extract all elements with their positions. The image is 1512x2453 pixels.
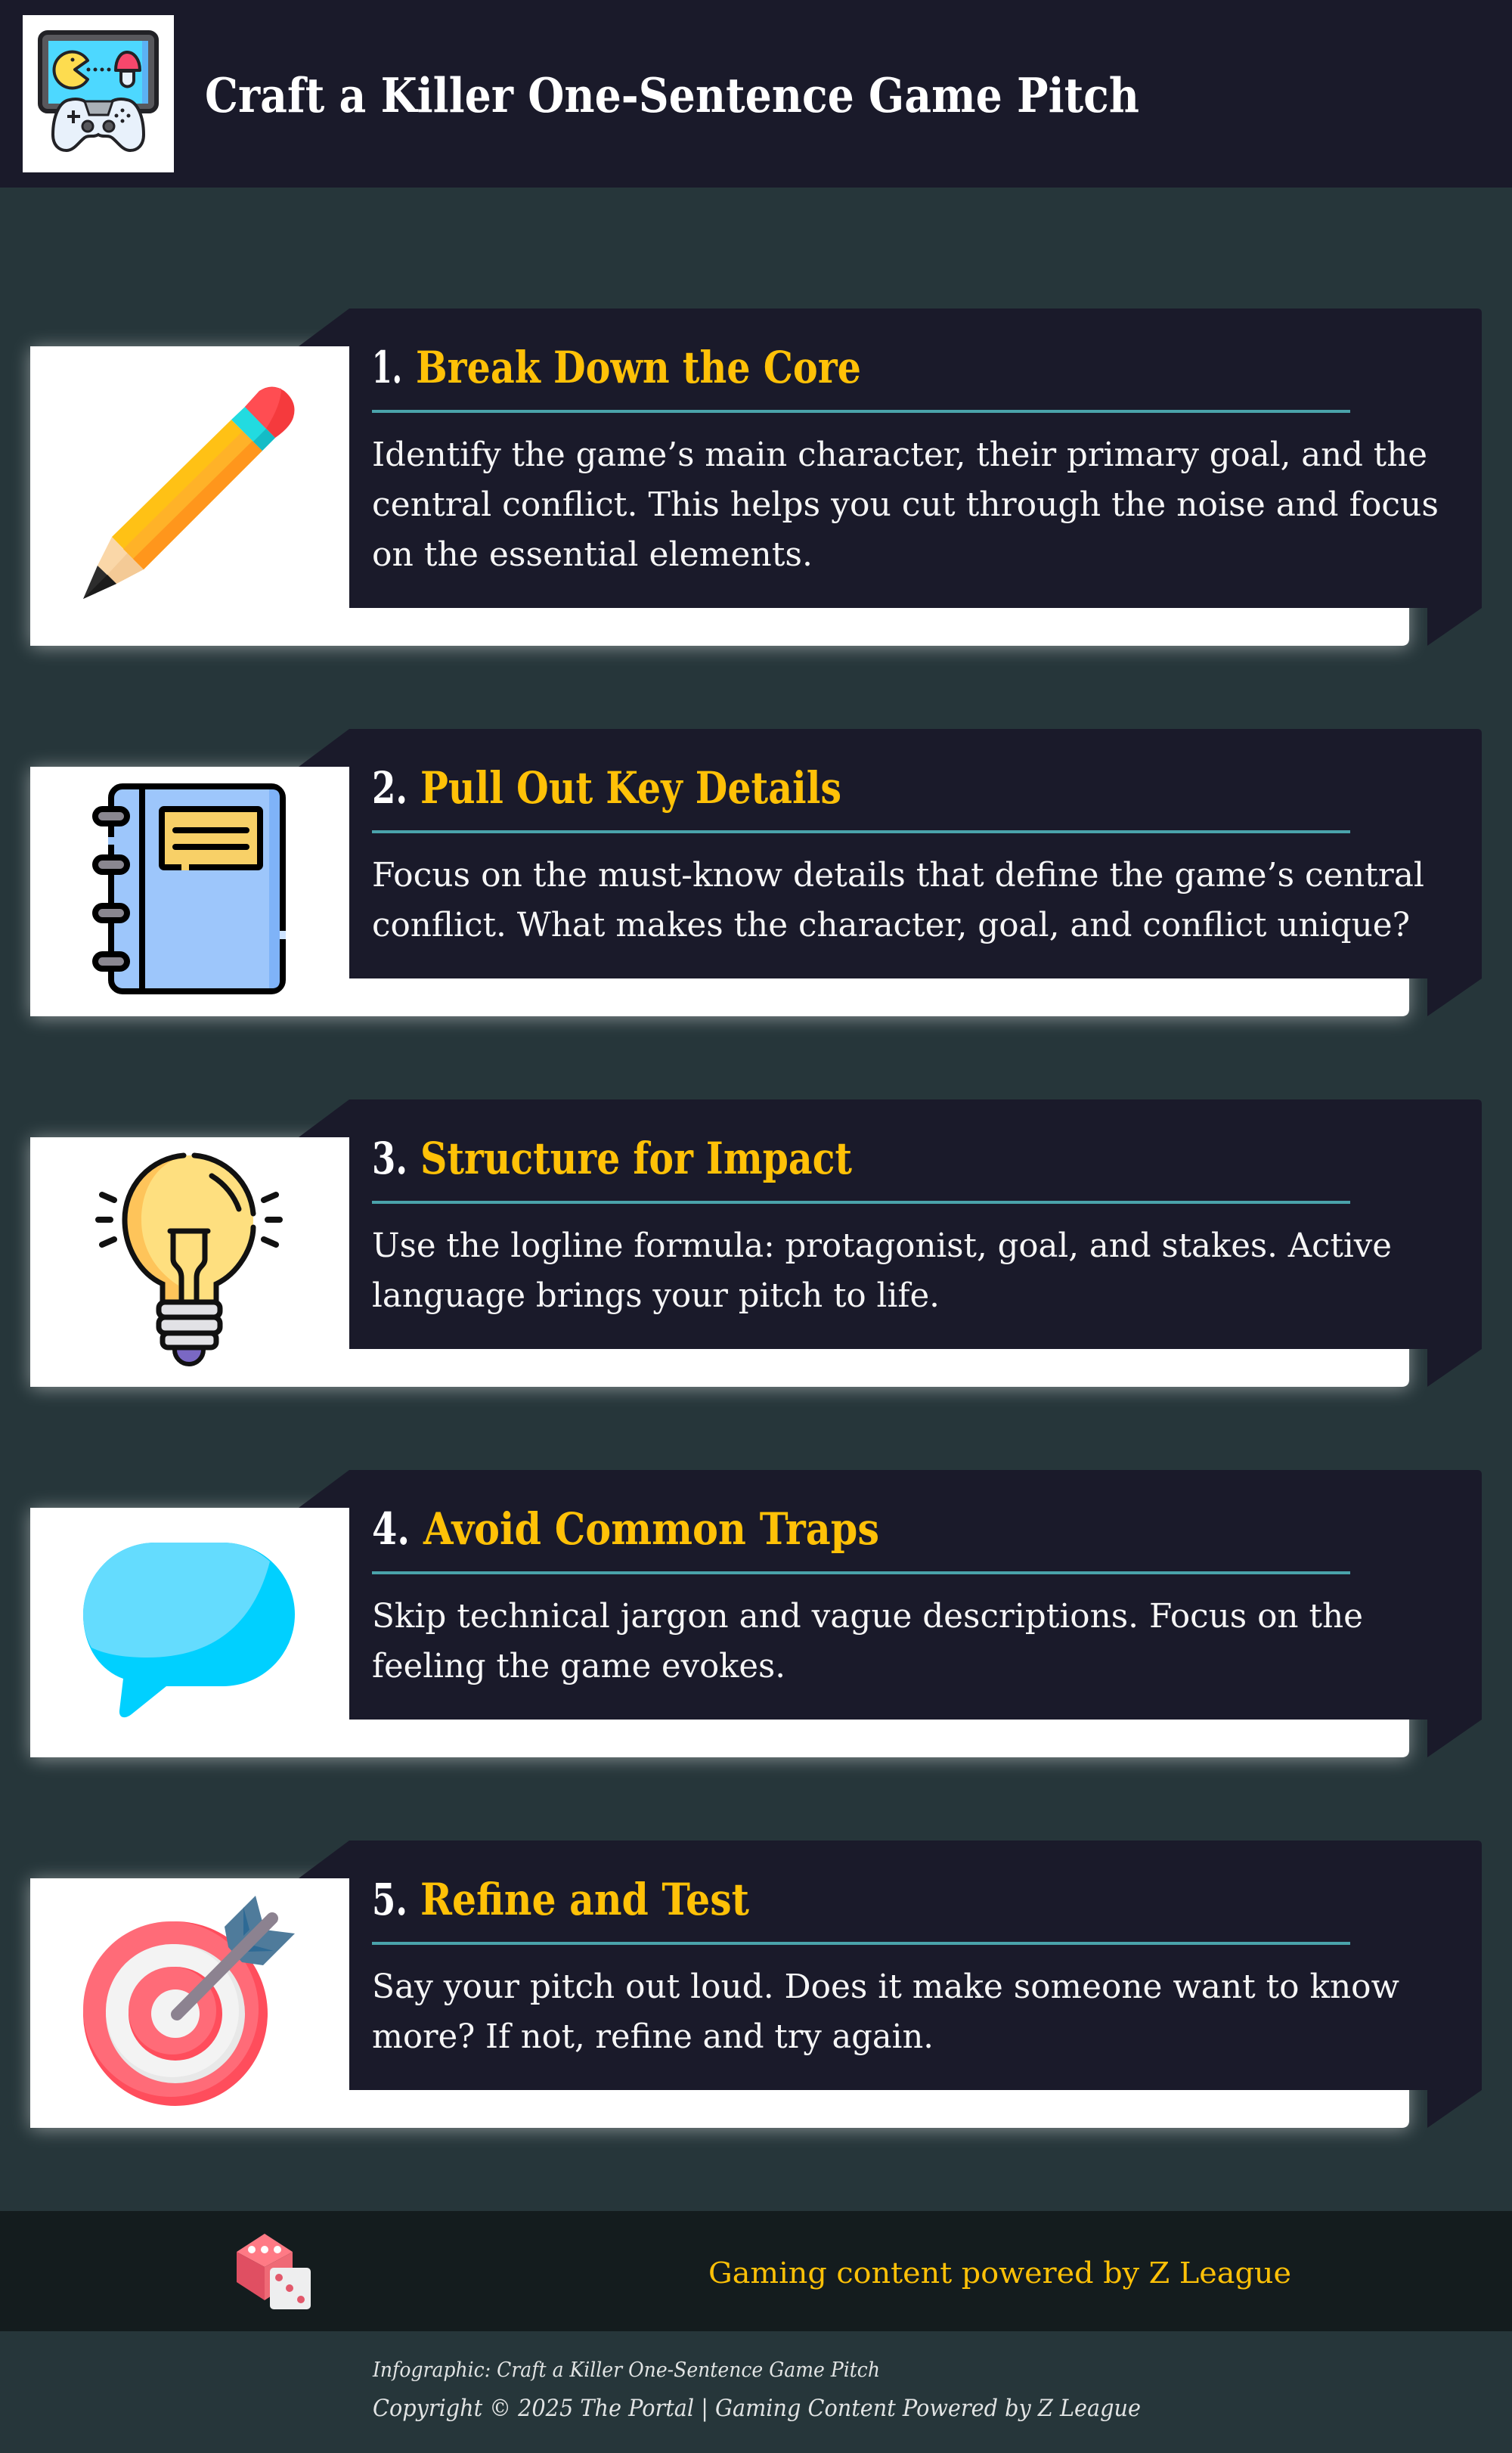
- heading: Refine and Test: [420, 1874, 749, 1925]
- heading: 1.: [372, 342, 402, 393]
- heading: 5.: [372, 1874, 407, 1925]
- panel: step 1: [30, 309, 1482, 647]
- icon: light bulb: [98, 1155, 280, 1364]
- text block: [372, 436, 1439, 574]
- heading: Pull Out Key Details: [420, 762, 841, 814]
- text block: language brings your pitch to life.: [372, 1276, 940, 1315]
- text block: feeling the game evokes.: [372, 1647, 785, 1685]
- text block: [372, 856, 1424, 944]
- panel: step 2: [30, 729, 1482, 1018]
- icon: speech bubble: [83, 1543, 295, 1717]
- icon: notebook: [95, 786, 286, 991]
- footer credits: Copyright © 2025 The Portal | Gaming Content Powered by Z League: [373, 2395, 1141, 2422]
- icon: target and arrow: [83, 1896, 295, 2106]
- panel: step 5: [30, 1841, 1482, 2129]
- icon: dice: [237, 2234, 311, 2309]
- title: Craft a Killer One-Sentence Game Pitch: [205, 67, 1139, 123]
- text block: [372, 1968, 1399, 2056]
- heading: 3.: [372, 1133, 407, 1184]
- footer credits: [372, 2358, 1141, 2422]
- text block: central conflict. This helps you cut through the noise and focus: [372, 485, 1439, 524]
- text block: Identify the game’s main character, their primary goal, and the: [372, 436, 1427, 474]
- header: [0, 0, 1512, 188]
- text block: Say your pitch out loud. Does it make someone want to know: [372, 1968, 1399, 2006]
- footer band: [0, 2211, 1512, 2331]
- heading: Break Down the Core: [416, 342, 861, 393]
- footer credits: Infographic: Craft a Killer One-Sentence Game Pitch: [372, 2358, 880, 2382]
- text block: Focus on the must-know details that define the game’s central: [372, 856, 1424, 895]
- text block: on the essential elements.: [372, 535, 813, 574]
- footer tagline: Gaming content powered by Z League: [708, 2256, 1291, 2290]
- icon: pencil: [83, 387, 295, 599]
- heading: 4.: [372, 1503, 410, 1555]
- heading: Avoid Common Traps: [423, 1503, 879, 1555]
- text block: more? If not, refine and try again.: [372, 2017, 934, 2056]
- text block: [372, 1597, 1363, 1685]
- panel: step 4: [30, 1470, 1482, 1759]
- heading: Structure for Impact: [420, 1133, 852, 1184]
- text block: [372, 1226, 1392, 1315]
- heading: 2.: [372, 762, 407, 814]
- text block: Skip technical jargon and vague descriptions. Focus on the: [372, 1597, 1363, 1636]
- logo: game monitor and controller: [23, 15, 174, 172]
- text block: conflict. What makes the character, goal, and conflict unique?: [372, 906, 1410, 944]
- text block: Use the logline formula: protagonist, goal, and stakes. Active: [372, 1226, 1392, 1265]
- panel: step 3: [30, 1099, 1482, 1388]
